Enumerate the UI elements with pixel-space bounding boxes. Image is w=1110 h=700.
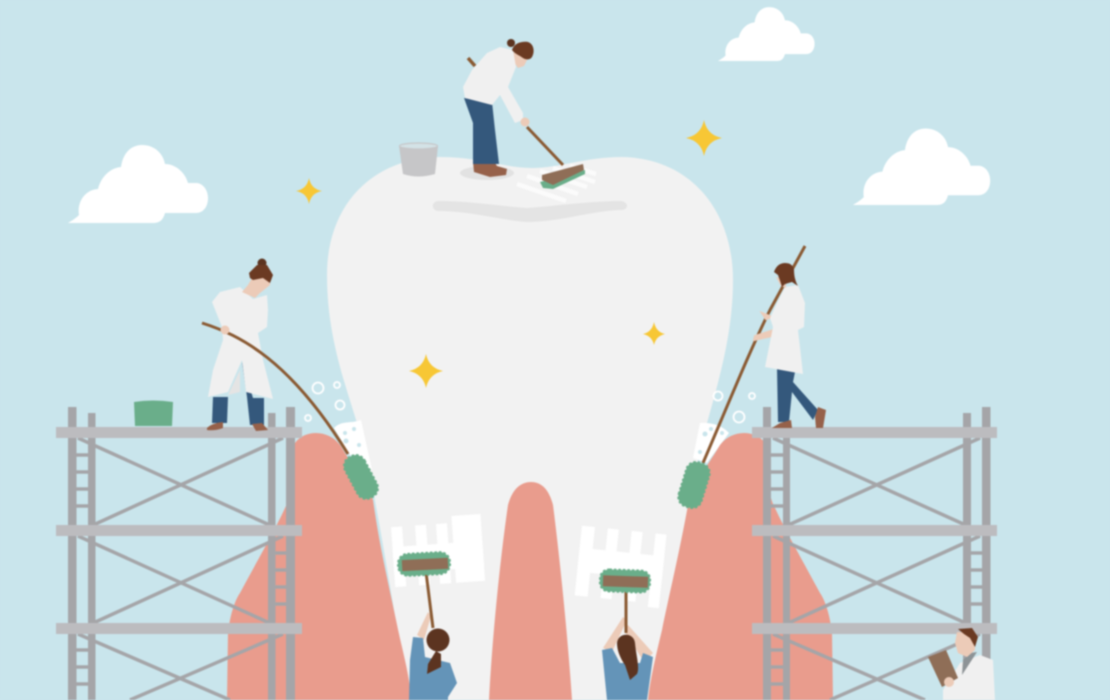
cloud: top right xyxy=(718,7,815,61)
gum: right xyxy=(648,433,833,700)
worker: lower left xyxy=(397,552,457,700)
cloud: right xyxy=(853,129,990,205)
cloud: left xyxy=(68,145,208,223)
scrubbed patch: top xyxy=(517,166,596,201)
scrubbed patch: lower left xyxy=(391,514,485,587)
scrubbed patch: lower right xyxy=(574,526,667,608)
scaffold: left xyxy=(56,407,302,700)
bubbles: right xyxy=(714,392,755,422)
tooth xyxy=(327,157,733,700)
scaffold: right xyxy=(752,407,997,700)
gum: left xyxy=(227,433,411,700)
tooth groove xyxy=(433,201,627,222)
bubbles: left xyxy=(305,382,344,421)
foam: right xyxy=(693,423,729,463)
sparkle: on tooth right xyxy=(643,322,665,345)
bucket: grey xyxy=(399,143,438,176)
sparkle: upper left xyxy=(296,178,322,204)
worker: doctor with clipboard xyxy=(928,628,995,700)
sparkle: top right xyxy=(686,120,722,156)
worker: lower right xyxy=(600,569,653,700)
gum: centre xyxy=(489,482,572,700)
foam: left xyxy=(334,420,372,470)
worker: right platform xyxy=(676,246,826,511)
sparkle: on tooth left xyxy=(409,354,443,388)
worker: top of tooth xyxy=(460,39,585,189)
worker: left platform xyxy=(202,258,382,502)
bucket: green xyxy=(134,400,173,426)
